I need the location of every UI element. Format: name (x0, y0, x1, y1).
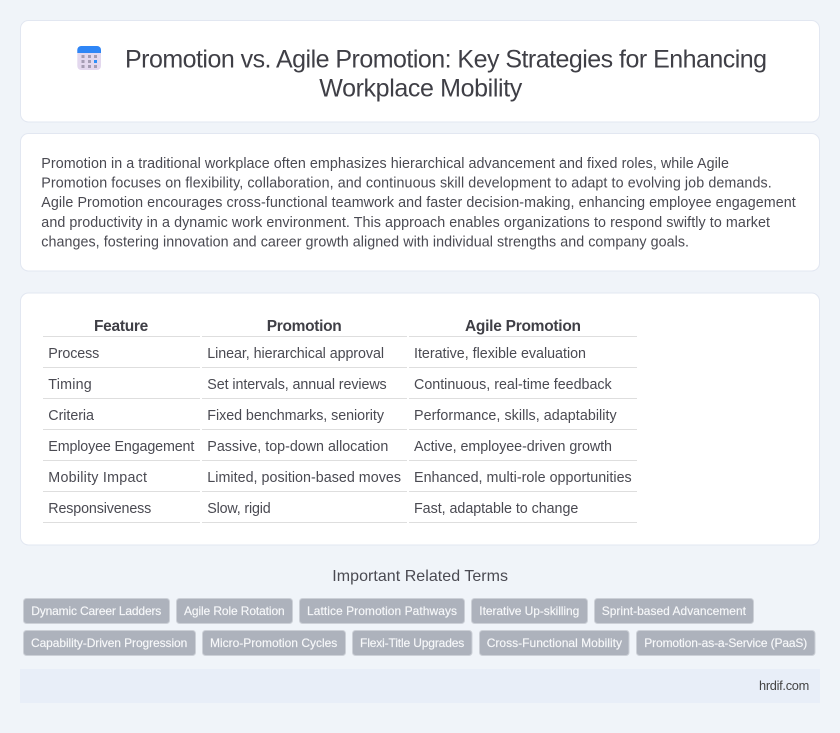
footer bar (20, 669, 820, 703)
row: process (48, 346, 586, 362)
row: criteria: Fixed benchmarks, seniority (207, 408, 385, 424)
tag: Micro-Promotion Cycles (210, 636, 337, 650)
table header row: Promotion (267, 318, 342, 335)
paragraph: Promotion in a traditional workplace often emphasizes hierarchical advancement and fixed roles, while Agile (41, 156, 729, 172)
tag: Lattice Promotion Pathways (307, 604, 457, 618)
tag (594, 598, 754, 624)
row: process: Process (48, 346, 99, 362)
row: criteria: Criteria (48, 408, 94, 424)
tag: Promotion-as-a-Service (PaaS) (644, 636, 807, 650)
row: responsiveness: Slow, rigid (207, 501, 271, 517)
tag (636, 630, 815, 656)
paragraph: changes, fostering innovation and career growth aligned with individual strengths and company goals. (41, 234, 689, 250)
panel: comparison table (20, 293, 820, 545)
panel: introduction text (20, 134, 820, 271)
paragraph: Promotion focuses on flexibility, collaboration, and continuous skill development to adapt to evolving job demands. (41, 176, 772, 192)
row: mobility impact: Limited, position-based moves (207, 470, 401, 486)
tag (472, 598, 588, 624)
tag (300, 598, 464, 624)
tag (176, 598, 292, 624)
row: mobility impact (48, 470, 632, 486)
row: employee engagement (48, 439, 612, 455)
paragraph: and productivity in a dynamic work environment. This approach enables organizations to respond swiftly to market (41, 215, 770, 231)
row: timing: Set intervals, annual reviews (207, 377, 387, 393)
table header row (94, 318, 581, 335)
row: responsiveness: Fast, adaptable to change (414, 501, 578, 517)
row: process: Iterative, flexible evaluation (414, 346, 586, 362)
tag: Iterative Up-skilling (479, 604, 579, 618)
row: employee engagement: Passive, top-down allocation (207, 439, 388, 455)
row: timing: Continuous, real-time feedback (414, 377, 613, 393)
row: timing: Timing (48, 377, 92, 393)
tag: Sprint-based Advancement (602, 604, 747, 618)
row: responsiveness: Responsiveness (48, 501, 151, 517)
tag (480, 630, 629, 656)
tag: Flexi-Title Upgrades (360, 636, 464, 650)
related term tags (24, 598, 815, 656)
paragraph: Agile Promotion encourages cross-functional teamwork and faster decision-making, enhancing employee engagement (41, 195, 796, 211)
row: employee engagement: Employee Engagement (48, 439, 194, 455)
tag: Cross-Functional Mobility (487, 636, 622, 650)
row: mobility impact: Enhanced, multi-role opportunities (414, 470, 632, 486)
table header row: Feature (94, 318, 149, 335)
title (125, 46, 767, 102)
row: timing (48, 377, 613, 393)
paragraph (41, 156, 796, 250)
row: mobility impact: Mobility Impact (48, 470, 147, 486)
heading: important related terms: Important Related Terms (332, 568, 508, 585)
title: Promotion vs. Agile Promotion: Key Strategies for Enhancing (125, 46, 767, 74)
panel: title card (20, 20, 820, 122)
tag (352, 630, 472, 656)
tag (24, 630, 196, 656)
table header row: Agile Promotion (465, 318, 581, 335)
tag: Dynamic Career Ladders (31, 604, 161, 618)
tag (202, 630, 346, 656)
row: responsiveness (48, 501, 578, 517)
row: process: Linear, hierarchical approval (207, 346, 384, 362)
icon: calendar (77, 46, 101, 70)
tag: Agile Role Rotation (184, 604, 285, 618)
row: criteria (48, 408, 618, 424)
row: employee engagement: Active, employee-driven growth (414, 439, 612, 455)
tag (24, 598, 170, 624)
row: criteria: Performance, skills, adaptability (414, 408, 618, 424)
title: Workplace Mobility (319, 74, 523, 102)
tag: Capability-Driven Progression (31, 636, 187, 650)
footer source: hrdif.com (759, 678, 809, 693)
